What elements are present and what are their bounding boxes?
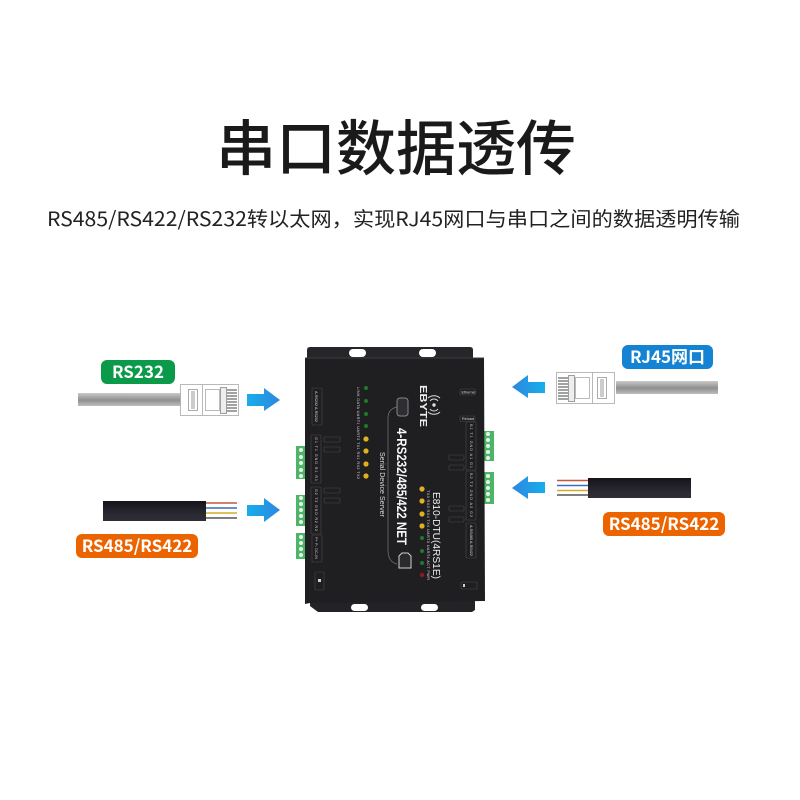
RS232 cable with RJ45 plug bbox=[78, 384, 238, 416]
small port labels: A-RS485 A-RS422 bbox=[469, 525, 473, 556]
RS232 label bbox=[101, 358, 175, 384]
mounting holes bbox=[349, 349, 438, 611]
arrow: left RS485 to device bbox=[247, 498, 280, 522]
title: 串口数据透传 bbox=[216, 101, 576, 188]
small port labels: B1 T1 GND A1 G1 bbox=[469, 424, 473, 468]
small port labels: B2 T2 GND A2 G2 bbox=[469, 473, 473, 517]
power switch marks bbox=[318, 579, 465, 587]
brand EBYTE: EBYTE bbox=[417, 385, 428, 427]
left RS485 label: RS485/RS422 bbox=[82, 532, 192, 557]
small port labels: LINK DATA UART1 UART2 TX1 RX1 RX2 TX2 bbox=[356, 387, 360, 479]
bracket line bbox=[388, 407, 397, 564]
small port labels: TX3 RX3 RX4 TX4 UART3 UART4 ACT PWR bbox=[426, 490, 430, 580]
terminal blocks bbox=[296, 431, 494, 559]
small port labels: Ethernet bbox=[462, 390, 477, 394]
device description: Serial Device Server bbox=[378, 452, 387, 517]
DB9 connector icon bbox=[397, 398, 408, 416]
small port labels: A-RS232 A-RS232 bbox=[314, 391, 318, 422]
small port labels: G1 T1 GND R1 R1 bbox=[314, 437, 318, 481]
right RS485 label: RS485/RS422 bbox=[609, 510, 719, 535]
small port labels: G2 T2 GND R2 R2 bbox=[314, 489, 318, 531]
arrow: RJ45 to device bbox=[512, 375, 545, 398]
RJ45 cable with plug bbox=[556, 372, 718, 404]
small port labels bbox=[314, 387, 477, 580]
device body bbox=[305, 358, 485, 604]
mounting flange bottom bbox=[310, 600, 475, 612]
model name: 4-RS232/485/422 NET bbox=[394, 428, 410, 545]
status LEDs bbox=[363, 386, 425, 577]
left RS485 cable bbox=[103, 501, 237, 521]
device: serial server bbox=[296, 347, 494, 612]
subtitle: RS485/RS422/RS232转以太网，实现RJ45网口与串口之间的数据透明传输 bbox=[47, 203, 740, 232]
RJ45 icon bbox=[399, 553, 411, 568]
RJ45 label: RJ45网口 bbox=[630, 343, 705, 368]
device part number: E810-DTU(4RS1E) bbox=[430, 492, 442, 579]
wifi logo bbox=[428, 396, 440, 414]
right RS485 cable bbox=[557, 478, 691, 498]
arrow: right RS485 to device bbox=[512, 476, 545, 499]
small port labels: Reload bbox=[462, 417, 474, 421]
port label outlines bbox=[311, 388, 477, 590]
small port labels: P+ P- DC-IN bbox=[314, 537, 318, 559]
RS232 label: RS232 bbox=[112, 358, 164, 383]
mounting flange top bbox=[307, 347, 473, 360]
arrow: RS232 to device bbox=[247, 388, 280, 411]
